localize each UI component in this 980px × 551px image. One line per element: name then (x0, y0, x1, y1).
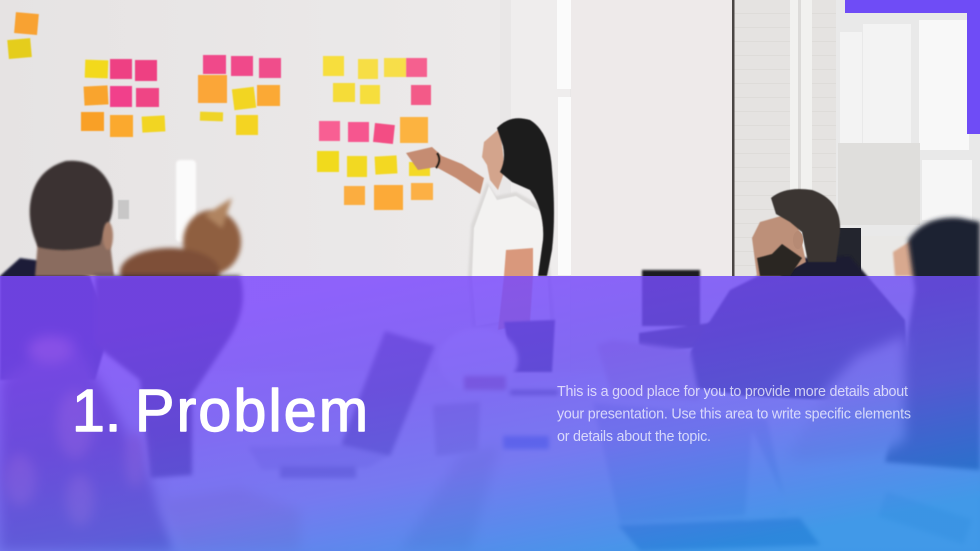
wall (0, 0, 502, 551)
brick column (732, 0, 836, 276)
title: 1. (72, 378, 121, 444)
body text: or details about the topic. (557, 429, 711, 445)
foreground man body (0, 258, 110, 380)
bearded man face (752, 212, 806, 276)
centre laptop (593, 403, 787, 523)
sticky notes (7, 12, 433, 210)
foreground man neck (35, 226, 114, 276)
body text: your presentation. Use this area to write specific elements (557, 406, 911, 422)
notebook right (878, 492, 972, 544)
pen cup (433, 402, 480, 456)
foreground man glasses (118, 200, 129, 219)
window reflection (176, 160, 196, 242)
presenter jeans (504, 320, 555, 372)
foreground woman (0, 198, 500, 551)
left laptop (340, 331, 435, 456)
bearded man ear (793, 231, 803, 249)
sticky notes: first group (81, 59, 165, 137)
window (835, 0, 980, 276)
gradient panel (0, 276, 980, 551)
foreground woman head (95, 276, 243, 478)
purple corner bracket (845, 0, 980, 134)
foreground woman arm (160, 488, 300, 551)
presenter face (482, 128, 505, 190)
laptops and table objects (248, 331, 972, 551)
presenter (406, 118, 555, 372)
body text: This is a good place for you to provide more details about (557, 384, 908, 400)
bearded man (680, 189, 910, 400)
bearded man body (680, 256, 910, 400)
body text (557, 384, 911, 445)
foreground man hair (30, 161, 113, 250)
bearded man hair (771, 189, 840, 262)
foreground man ear (103, 222, 113, 250)
seated woman right (787, 218, 980, 470)
sticky notes: third group (317, 56, 433, 210)
presenter shirt (468, 182, 555, 330)
monitor and desk (639, 270, 716, 352)
hand with tablet (597, 340, 700, 400)
foreground woman hair bun (120, 198, 241, 296)
presenter hair (497, 118, 554, 276)
sticky notes: second group (198, 55, 281, 135)
bearded man beard (757, 244, 802, 276)
sticky notes: top-left pair (7, 12, 39, 59)
presenter arm and hand (406, 147, 484, 194)
table (170, 372, 980, 551)
pens (464, 376, 506, 390)
blurred round object by presenter (438, 328, 518, 392)
presenter arm lower (498, 248, 533, 330)
foreground man (0, 161, 129, 380)
title: Problem (135, 378, 368, 444)
foreground woman plaid shirt (0, 335, 175, 551)
